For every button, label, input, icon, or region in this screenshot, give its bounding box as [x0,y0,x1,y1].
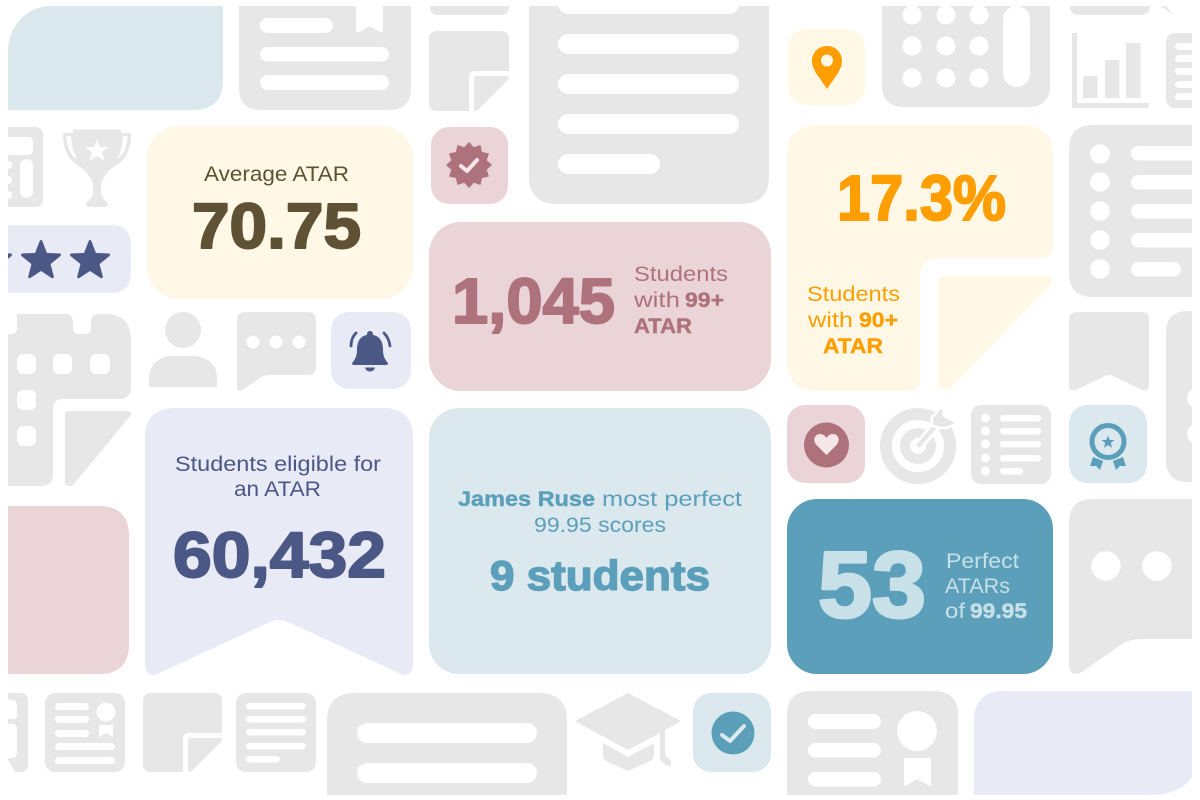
icon: small note top right [1070,6,1172,15]
panel: students eligible for an ATAR: 60,432 [173,519,386,591]
panel: 17.3% students with 90+ ATAR: ATAR [823,335,883,358]
icon tile: medal [1069,405,1147,483]
icon: person [149,312,217,387]
icon: bookmark [1069,312,1149,390]
icon: large speech bubble [1069,499,1200,674]
panel: 53 perfect ATARs of 99.95 [787,499,1053,674]
icon: folded note centre [429,31,509,111]
panel: 17.3% students with 90+ ATAR [787,125,1053,391]
icon tile: verified badge [431,127,508,204]
icon: certificate small [45,693,125,772]
panel: average ATAR: Average ATAR [204,163,349,186]
panel: average ATAR: 70.75 [192,190,361,262]
panel: James Ruse 9 students: most perfect [602,488,742,511]
panel: 53 perfect ATARs of 99.95: ATARs [945,575,1010,598]
panel: 53 perfect ATARs of 99.95: 99.95 [970,600,1027,623]
icon: graduation cap [575,693,681,771]
icon: building [0,314,131,486]
panel: 53 perfect ATARs of 99.95: of [945,600,965,623]
panel: students eligible for an ATAR: Students eligible for [175,453,381,476]
icon: bar chart [1072,33,1149,108]
panel: lavender decorative bottom right [974,691,1200,795]
icon: note top [430,6,509,15]
panel: James Ruse 9 students [429,408,771,674]
icon: small list [971,405,1051,484]
icon: large document [529,0,769,204]
panel: 53 perfect ATARs of 99.95: 53 [818,532,926,637]
panel: James Ruse 9 students: 9 students [490,552,710,599]
icon tile: bell [331,312,411,389]
panel: 1,045 students with 99+ ATAR: Students [634,263,728,286]
icon: list right [1069,125,1200,297]
panel: teal decorative top left [8,6,223,110]
icon tile: heart [787,405,865,483]
panel: 1,045 students with 99+ ATAR: ATAR [634,315,692,338]
icon tile: check [693,693,771,772]
icon: calculator partial [8,127,43,207]
panel: students eligible for an ATAR: an ATAR [234,478,321,501]
icon: trophy [63,130,131,207]
panel: average ATAR [147,126,413,299]
panel: 17.3% students with 90+ ATAR: with [807,309,853,332]
panel: 1,045 students with 99+ ATAR: 99+ [685,289,724,312]
icon: keypad [882,0,1050,107]
panel: star rating [0,225,131,293]
panel: James Ruse 9 students: James Ruse [458,488,595,511]
panel: 1,045 students with 99+ ATAR: with [633,289,680,312]
icon: document right edge [1166,33,1192,108]
panel: 1,045 students with 99+ ATAR: 1,045 [452,265,615,337]
panel: pink decorative left [0,506,129,674]
panel: 53 perfect ATARs of 99.95: Perfect [946,550,1019,573]
icon: partial bottom left [8,693,28,772]
icon: large document bottom [327,693,567,800]
icon: folded note bottom [143,693,222,772]
icon: speech bubble [237,312,316,391]
panel: 17.3% students with 90+ ATAR: 17.3% [837,162,1006,234]
icon: document with bookmark [239,0,411,110]
panel: 1,045 students with 99+ ATAR [429,222,771,391]
decorative folded corner [943,281,1047,384]
icon: folded note left [68,414,128,483]
icon: partial right edge [1166,311,1192,482]
icon: target [886,408,955,478]
icon: document bottom [236,693,316,772]
icon: certificate large [787,691,958,800]
icon tile: location pin [788,29,865,105]
panel: 17.3% students with 90+ ATAR: 90+ [859,309,898,332]
panel: James Ruse 9 students: 99.95 scores [534,514,666,537]
panel: students eligible for an ATAR [145,408,413,675]
panel: 17.3% students with 90+ ATAR: Students [807,283,900,306]
